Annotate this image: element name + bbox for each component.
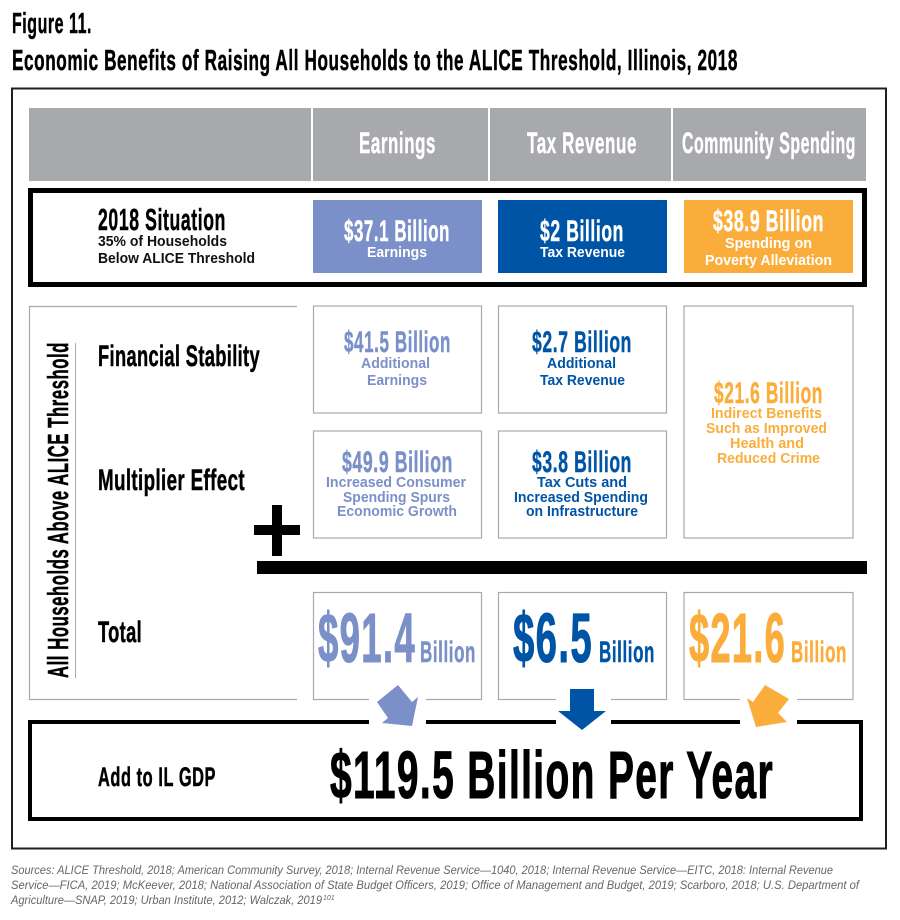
card: additional tax revenue: $2.7 Billion (532, 326, 632, 359)
sources (10, 865, 861, 907)
sources: Agriculture—SNAP, 2019; Urban Institute, 2012; Walczak, 2019 (10, 895, 323, 907)
situation label: 2018 Situation (98, 202, 226, 237)
bracket: all households above threshold (30, 306, 297, 700)
total: earnings (314, 592, 482, 700)
tax revenue tile: $2 Billion (540, 215, 624, 248)
total: tax revenue: $6.5 (513, 599, 593, 677)
arrow: earnings (377, 685, 418, 726)
header row: Tax Revenue (527, 127, 637, 160)
total: earnings: Billion (420, 636, 476, 669)
card: tax cuts: Tax Cuts and (537, 475, 627, 491)
card: tax cuts (498, 431, 666, 538)
community spending tile: Poverty Alleviation (705, 253, 832, 269)
card: additional earnings (314, 306, 482, 413)
situation label (98, 202, 255, 267)
card: consumer spending: $49.9 Billion (342, 446, 453, 479)
community spending tile (684, 200, 853, 273)
total: community spending: Billion (791, 636, 847, 669)
card: consumer spending: Increased Consumer (326, 475, 466, 491)
card: tax cuts: Increased Spending (514, 490, 648, 506)
community spending tile: $38.9 Billion (713, 205, 824, 238)
row labels: Total (98, 616, 142, 649)
panel: add to GDP (30, 722, 861, 819)
tax revenue tile: Tax Revenue (540, 245, 625, 261)
plus sign (254, 505, 300, 556)
card: indirect benefits (684, 306, 853, 538)
card: tax cuts: $3.8 Billion (532, 446, 632, 479)
row labels (98, 340, 260, 649)
sources: Sources: ALICE Threshold, 2018; American Community Survey, 2018; Internal Revenue Service—1040, 2018; Internal Revenue Service—EITC, 2018: Internal Revenue (11, 865, 833, 877)
bracket: all households above threshold: All Households Above ALICE Threshold (43, 342, 75, 678)
total: community spending: $21.6 (689, 599, 786, 677)
card: additional tax revenue (498, 306, 666, 413)
total: earnings: $91.4 (318, 599, 416, 677)
card: indirect benefits: Reduced Crime (717, 451, 820, 467)
title: Figure 11. (12, 8, 92, 40)
card: consumer spending: Economic Growth (337, 504, 457, 520)
header row: Earnings (359, 127, 436, 160)
earnings tile (313, 200, 482, 273)
arrow: community spending (747, 685, 789, 727)
situation label: 35% of Households (98, 234, 227, 250)
card: additional tax revenue: Tax Revenue (540, 373, 625, 389)
card: additional earnings: $41.5 Billion (344, 326, 451, 359)
title (12, 8, 738, 77)
panel: add to GDP: Add to IL GDP (98, 762, 216, 792)
sum bar (257, 561, 867, 574)
row labels: Multiplier Effect (98, 464, 245, 497)
total: tax revenue: Billion (599, 636, 655, 669)
row labels: Financial Stability (98, 340, 260, 373)
arrow: tax revenue (558, 689, 606, 730)
earnings tile: Earnings (367, 245, 427, 261)
tax revenue tile (498, 200, 667, 273)
sources: Service—FICA, 2019; McKeever, 2018; National Association of State Budget Officers, 2019; Office of Management and Budget, 2019; Scarboro, 2018; U.S. Department of (11, 880, 861, 892)
card: consumer spending (314, 431, 482, 538)
card: additional tax revenue: Additional (547, 356, 616, 372)
card: consumer spending: Spending Spurs (343, 490, 450, 506)
earnings tile: $37.1 Billion (344, 215, 450, 248)
card: tax cuts: on Infrastructure (526, 504, 638, 520)
card: indirect benefits: Indirect Benefits (711, 406, 822, 422)
card: indirect benefits: Health and (730, 436, 804, 452)
card: indirect benefits: $21.6 Billion (714, 377, 823, 410)
total: tax revenue (498, 592, 666, 700)
card: additional earnings: Earnings (367, 373, 427, 389)
card: indirect benefits: Such as Improved (706, 421, 827, 437)
total: community spending (684, 592, 853, 700)
header row (29, 108, 866, 181)
community spending tile: Spending on (725, 236, 812, 252)
panel: 2018 situation (30, 190, 864, 284)
card: additional earnings: Additional (361, 356, 430, 372)
situation label: Below ALICE Threshold (98, 251, 255, 267)
sources: 101 (323, 895, 335, 902)
